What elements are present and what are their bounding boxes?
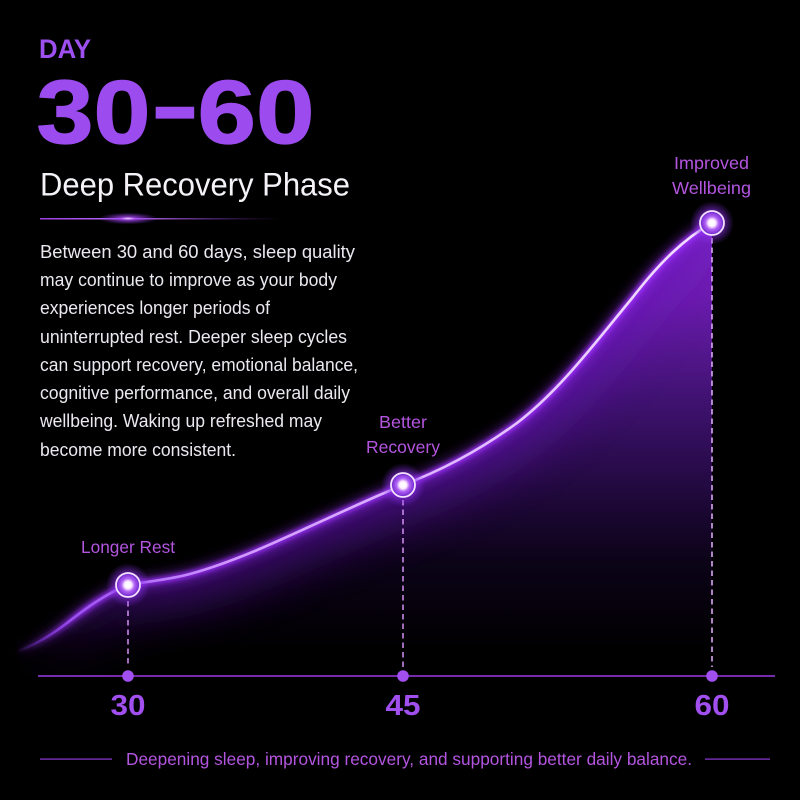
- label: improved wellbeing: [672, 153, 751, 198]
- heading: day range 30-60: -: [151, 56, 199, 156]
- curve line: [18, 223, 712, 651]
- body text block: Between 30 and 60 days, sleep quality: [40, 242, 355, 262]
- label: better recovery: [366, 412, 440, 457]
- heading: day label: DAY: [39, 34, 91, 64]
- area under curve: [40, 231, 712, 662]
- heading: day range 30-60: 30: [36, 63, 150, 163]
- body text block: cognitive performance, and overall daily: [40, 383, 350, 403]
- footer caption: Deepening sleep, improving recovery, and supporting better daily balance.: [126, 749, 692, 769]
- marker: day 60: [690, 201, 734, 682]
- curve inner glow: [18, 223, 712, 651]
- body text block: become more consistent.: [40, 440, 236, 460]
- heading: day range 30-60: [36, 56, 314, 163]
- axis value: 30: 30: [110, 690, 146, 722]
- body text block: uninterrupted rest. Deeper sleep cycles: [40, 327, 347, 347]
- body text block: may continue to improve as your body: [40, 270, 337, 290]
- label: improved wellbeing: Wellbeing: [672, 178, 751, 198]
- body text block: wellbeing. Waking up refreshed may: [39, 411, 322, 431]
- body text block: experiences longer periods of: [40, 298, 271, 318]
- body text block: can support recovery, emotional balance,: [40, 355, 358, 375]
- body text block: [39, 242, 358, 460]
- glowing divider: [40, 212, 280, 224]
- axis line: [38, 675, 775, 677]
- label: better recovery: Recovery: [366, 437, 440, 457]
- label: longer rest: Longer Rest: [81, 537, 175, 557]
- subtitle: Deep Recovery Phase: [40, 166, 350, 202]
- heading: day range 30-60: 60: [198, 63, 314, 163]
- label: better recovery: Better: [379, 412, 427, 432]
- curve outer glow: [18, 223, 712, 651]
- chart: recovery curve: [18, 217, 712, 662]
- axis value: 60: 60: [694, 690, 730, 722]
- axis value: 45: 45: [386, 690, 421, 722]
- marker: day 30: [106, 563, 150, 682]
- marker: day 45: [381, 463, 425, 682]
- label: improved wellbeing: Improved: [674, 153, 749, 173]
